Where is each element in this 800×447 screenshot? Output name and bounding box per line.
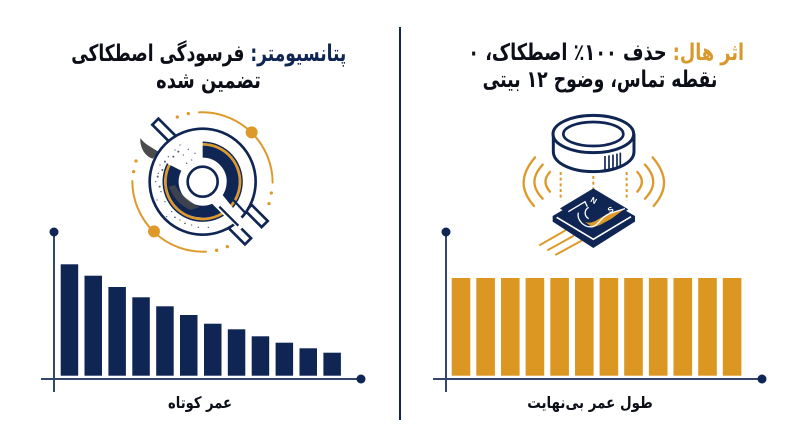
bars [452,278,741,376]
magnet symbol [585,209,625,227]
bar chart: short life [41,228,366,392]
pins [540,231,582,255]
grey debris [140,138,158,159]
title: hall effect: اثر هال: حذف ۱۰۰٪ اصطکاک، ۰ [468,40,744,66]
axes [433,228,766,392]
icon: worn potentiometer [132,112,273,252]
housing [150,129,256,235]
bars [61,264,341,376]
magnetic waves [524,157,664,206]
icon: hall sensor with magnet: S [606,204,616,215]
title: hall effect: نقطه تماس، وضوح ۱۲ بیتی [483,67,717,93]
label: infinite life: طول عمر بی‌نهایت [527,393,653,412]
terminals [152,119,268,244]
title: potentiometer [71,40,346,94]
title: potentiometer: پتانسیومتر: فرسودگی اصطکاکی [71,41,346,67]
center divider [399,27,401,420]
resistive track [163,142,242,221]
wear smudge [155,144,209,228]
title: hall effect [468,40,744,93]
bar chart: infinite life [433,228,766,392]
magnet ring [553,135,634,172]
wiper and hub [193,175,247,230]
icon: hall sensor with magnet [524,115,664,255]
icon: hall sensor with magnet: N [589,195,599,206]
axes [41,228,366,392]
title: potentiometer: تضمین شده [156,68,261,94]
dashed guides [561,172,627,201]
label: short life: عمر کوتاه [168,393,232,412]
sensor chip [553,192,635,248]
orbit arcs and dots [132,112,273,252]
